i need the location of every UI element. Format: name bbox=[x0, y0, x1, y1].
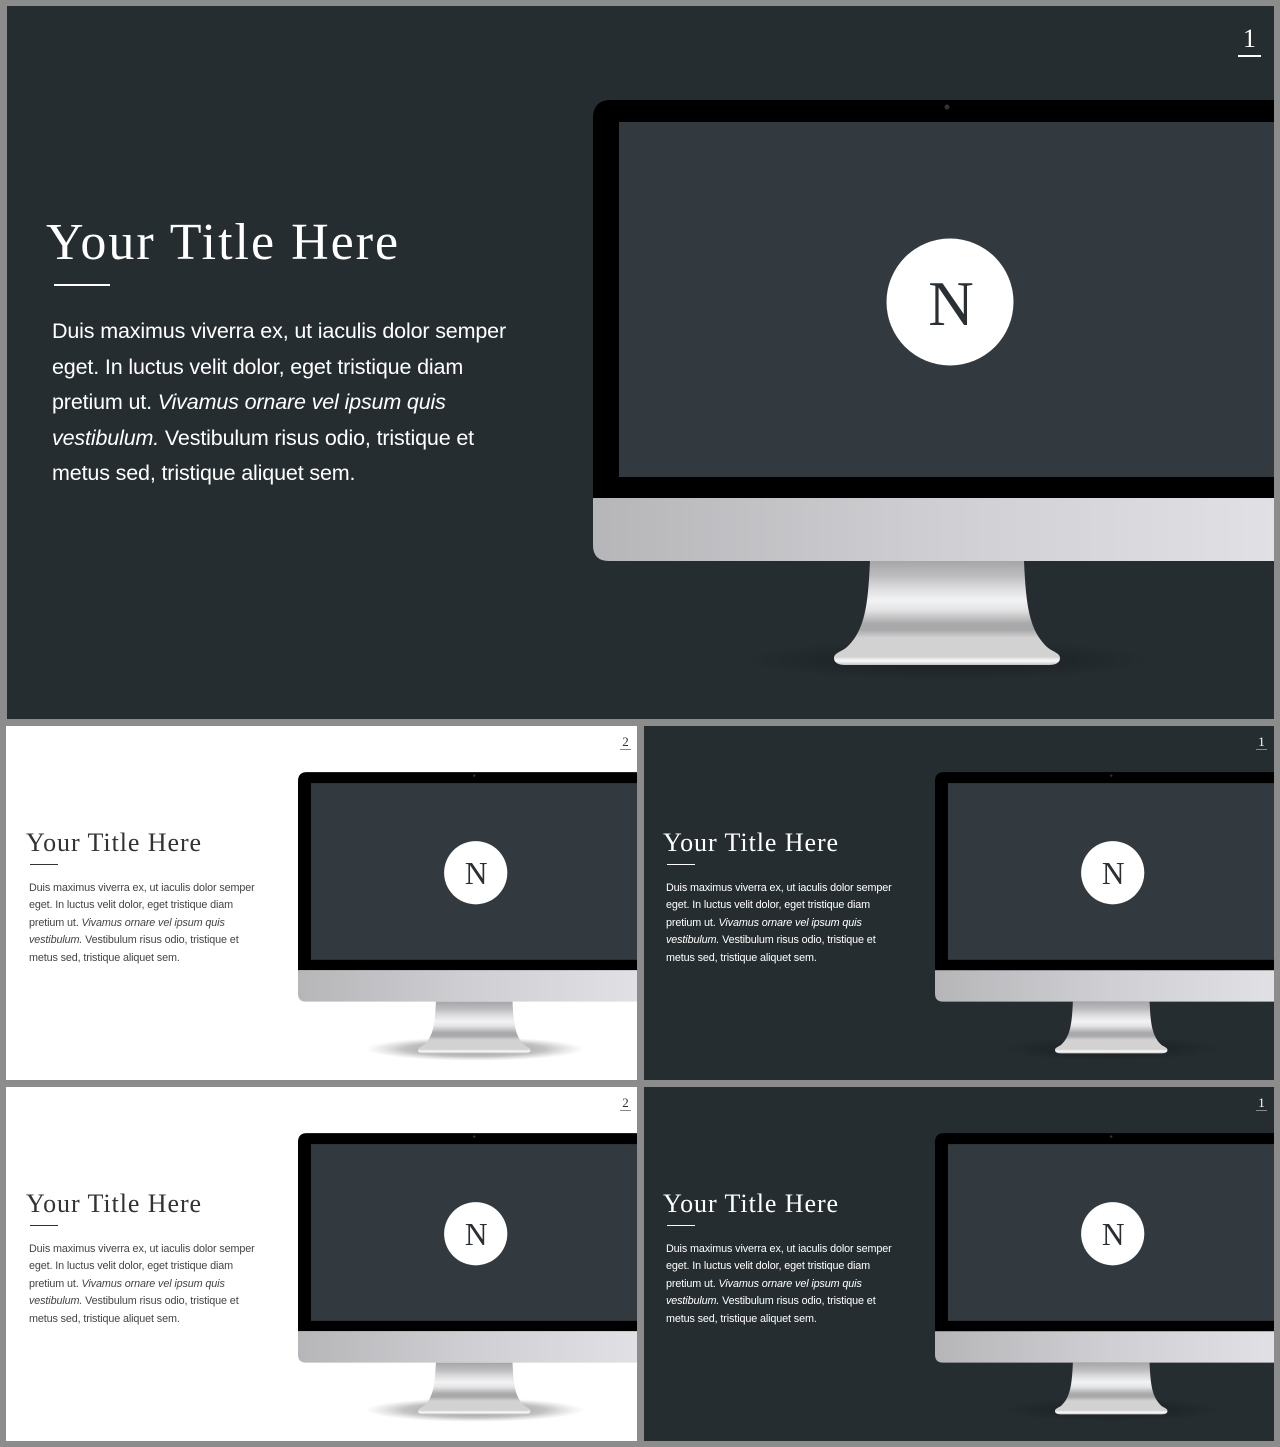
monitor mockup bbox=[935, 1133, 1274, 1416]
body text: eget. In luctus velit dolor, eget tristique diam bbox=[666, 899, 870, 911]
body text: pretium ut. Vivamus ornare vel ipsum quis bbox=[52, 390, 446, 414]
monitor bezel bbox=[935, 772, 1274, 970]
monitor chin bbox=[298, 970, 637, 1002]
body text: metus sed, tristique aliquet sem. bbox=[29, 1313, 180, 1325]
body text bbox=[29, 882, 255, 964]
monitor bezel bbox=[935, 1133, 1274, 1331]
title: Your Title Here bbox=[663, 1189, 839, 1218]
monitor screen bbox=[619, 122, 1274, 477]
body text bbox=[29, 1242, 255, 1325]
page number bbox=[1256, 735, 1267, 750]
logo circle bbox=[886, 238, 1014, 366]
monitor mockup bbox=[593, 100, 1274, 670]
panel: dark slide, row 2 bbox=[644, 1087, 1274, 1441]
panel: light slide, row 1 bbox=[6, 726, 637, 1080]
monitor mockup bbox=[935, 772, 1274, 1054]
title: Your Title Here bbox=[663, 828, 839, 857]
body text: metus sed, tristique aliquet sem. bbox=[52, 461, 355, 485]
body text: pretium ut. Vivamus ornare vel ipsum quis bbox=[29, 917, 225, 929]
page number: 1 bbox=[1258, 734, 1265, 749]
body text: metus sed, tristique aliquet sem. bbox=[666, 952, 817, 964]
body text: vestibulum. Vestibulum risus odio, tristique et bbox=[29, 934, 239, 946]
logo circle bbox=[444, 1202, 507, 1265]
monitor bezel bbox=[593, 100, 1274, 498]
monitor mockup bbox=[298, 772, 637, 1060]
body text: metus sed, tristique aliquet sem. bbox=[29, 952, 180, 964]
monitor chin bbox=[593, 498, 1274, 561]
panel: light slide, row 2 bbox=[6, 1087, 637, 1441]
page number bbox=[620, 1096, 631, 1111]
monitor screen bbox=[948, 1144, 1274, 1321]
monitor screen bbox=[311, 783, 637, 960]
body text: pretium ut. Vivamus ornare vel ipsum quis bbox=[29, 1278, 225, 1290]
title: Your Title Here bbox=[46, 214, 400, 271]
body text: vestibulum. Vestibulum risus odio, tristique et bbox=[666, 1295, 876, 1307]
title: Your Title Here bbox=[26, 1189, 202, 1218]
monitor chin bbox=[935, 1331, 1274, 1363]
body text bbox=[666, 1242, 892, 1325]
body text: vestibulum. Vestibulum risus odio, tristique et bbox=[52, 426, 474, 450]
logo circle: N bbox=[1102, 856, 1125, 891]
body text: eget. In luctus velit dolor, eget tristique diam bbox=[52, 354, 463, 378]
logo circle: N bbox=[928, 269, 974, 339]
monitor bezel bbox=[298, 772, 637, 970]
monitor stand bbox=[418, 1363, 530, 1414]
body text: pretium ut. Vivamus ornare vel ipsum quis bbox=[666, 1278, 862, 1290]
monitor bezel bbox=[298, 1133, 637, 1331]
monitor stand bbox=[418, 1002, 530, 1053]
body text: Duis maximus viverra ex, ut iaculis dolor semper bbox=[666, 882, 892, 894]
body text: Duis maximus viverra ex, ut iaculis dolor semper bbox=[29, 882, 255, 894]
logo circle bbox=[444, 841, 507, 904]
monitor chin bbox=[298, 1331, 637, 1363]
monitor mockup bbox=[298, 1133, 637, 1421]
logo circle: N bbox=[1102, 1217, 1125, 1252]
monitor stand bbox=[834, 561, 1060, 665]
body text: Duis maximus viverra ex, ut iaculis dolor semper bbox=[29, 1242, 255, 1254]
body text: Duis maximus viverra ex, ut iaculis dolor semper bbox=[666, 1242, 892, 1254]
monitor stand bbox=[1055, 1363, 1167, 1414]
body text: vestibulum. Vestibulum risus odio, tristique et bbox=[666, 934, 876, 946]
body text: metus sed, tristique aliquet sem. bbox=[666, 1313, 817, 1325]
monitor stand bbox=[1055, 1002, 1167, 1053]
logo circle bbox=[1081, 1202, 1144, 1265]
page number: 2 bbox=[622, 734, 629, 749]
monitor screen bbox=[311, 1144, 637, 1321]
body text: pretium ut. Vivamus ornare vel ipsum quis bbox=[666, 917, 862, 929]
body text bbox=[52, 319, 506, 485]
page number bbox=[620, 735, 631, 750]
monitor chin bbox=[935, 970, 1274, 1002]
body text bbox=[666, 882, 892, 964]
panel: large dark slide bbox=[7, 6, 1274, 719]
logo circle: N bbox=[465, 1217, 488, 1252]
page number: 1 bbox=[1243, 24, 1256, 53]
page number: 1 bbox=[1258, 1095, 1265, 1110]
panel: dark slide, row 1 bbox=[644, 726, 1274, 1080]
monitor screen bbox=[948, 783, 1274, 960]
body text: vestibulum. Vestibulum risus odio, tristique et bbox=[29, 1295, 239, 1307]
page number bbox=[1238, 24, 1261, 57]
page number bbox=[1256, 1096, 1267, 1111]
body text: eget. In luctus velit dolor, eget tristique diam bbox=[29, 899, 233, 911]
body text: eget. In luctus velit dolor, eget tristique diam bbox=[29, 1260, 233, 1272]
title: Your Title Here bbox=[26, 828, 202, 857]
body text: eget. In luctus velit dolor, eget tristique diam bbox=[666, 1260, 870, 1272]
body text: Duis maximus viverra ex, ut iaculis dolor semper bbox=[52, 319, 506, 343]
logo circle bbox=[1081, 841, 1144, 904]
logo circle: N bbox=[465, 856, 488, 891]
page number: 2 bbox=[622, 1095, 629, 1110]
